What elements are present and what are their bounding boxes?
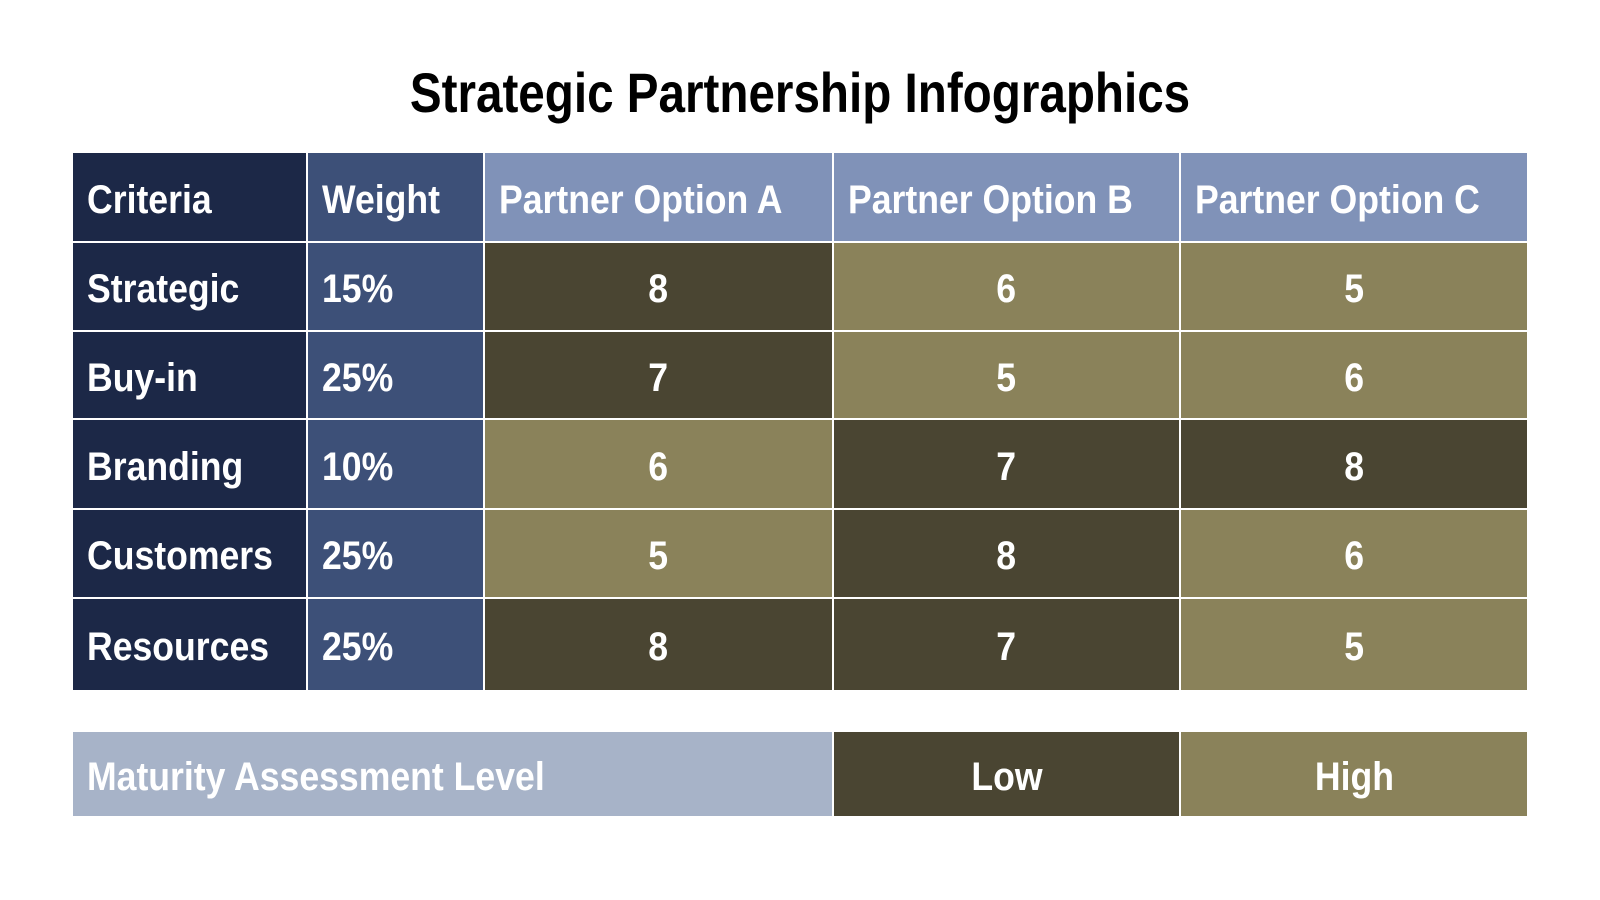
table: partner comparison: 6	[997, 267, 1016, 311]
table: partner comparison: Resources	[87, 625, 269, 669]
row: Buy-in	[73, 332, 1527, 418]
table: partner comparison: 6	[649, 444, 668, 488]
legend: low: Low	[971, 754, 1042, 798]
table: partner comparison: 25%	[322, 625, 393, 669]
table: partner comparison: Criteria	[87, 178, 212, 222]
table: partner comparison: 5	[1344, 267, 1364, 311]
table: partner comparison: 6	[1344, 534, 1364, 578]
legend label	[73, 732, 834, 816]
header row	[73, 153, 1527, 241]
table: partner comparison: 6	[1344, 356, 1364, 400]
legend: low	[834, 732, 1181, 816]
table: partner comparison: 8	[1344, 444, 1364, 488]
title: Strategic Partnership Infographics	[410, 61, 1190, 124]
table: partner comparison: 25%	[322, 356, 393, 400]
legend: high: High	[1314, 754, 1394, 798]
legend: maturity assessment level	[73, 732, 1527, 816]
legend label: Maturity Assessment Level	[87, 754, 545, 798]
legend: high	[1181, 732, 1527, 816]
table: partner comparison: Buy-in	[87, 356, 198, 400]
table: partner comparison: 5	[997, 356, 1016, 400]
table: partner comparison: 7	[997, 625, 1016, 669]
table: partner comparison: 10%	[322, 444, 393, 488]
row: Branding	[73, 420, 1527, 508]
table: partner comparison: 5	[1344, 625, 1364, 669]
table: partner comparison: 8	[649, 267, 668, 311]
table: partner comparison: Customers	[87, 534, 273, 578]
table: partner comparison: Partner Option C	[1195, 178, 1480, 222]
row: Resources	[73, 599, 1527, 690]
row: Strategic	[73, 243, 1527, 330]
table: partner comparison: 7	[997, 444, 1016, 488]
table: partner comparison: Partner Option B	[848, 178, 1133, 222]
table: partner comparison: 5	[649, 534, 668, 578]
table: partner comparison: 7	[649, 356, 668, 400]
table: partner comparison: Branding	[87, 444, 243, 488]
row: Customers	[73, 510, 1527, 597]
table: partner comparison: Partner Option A	[499, 178, 783, 222]
table: partner comparison: Strategic	[87, 267, 239, 311]
table: partner comparison: 8	[649, 625, 668, 669]
table: partner comparison: 15%	[322, 267, 393, 311]
table: partner comparison: 25%	[322, 534, 393, 578]
table: partner comparison: Weight	[322, 178, 440, 222]
table: partner comparison	[73, 153, 1527, 690]
table: partner comparison: 8	[997, 534, 1016, 578]
